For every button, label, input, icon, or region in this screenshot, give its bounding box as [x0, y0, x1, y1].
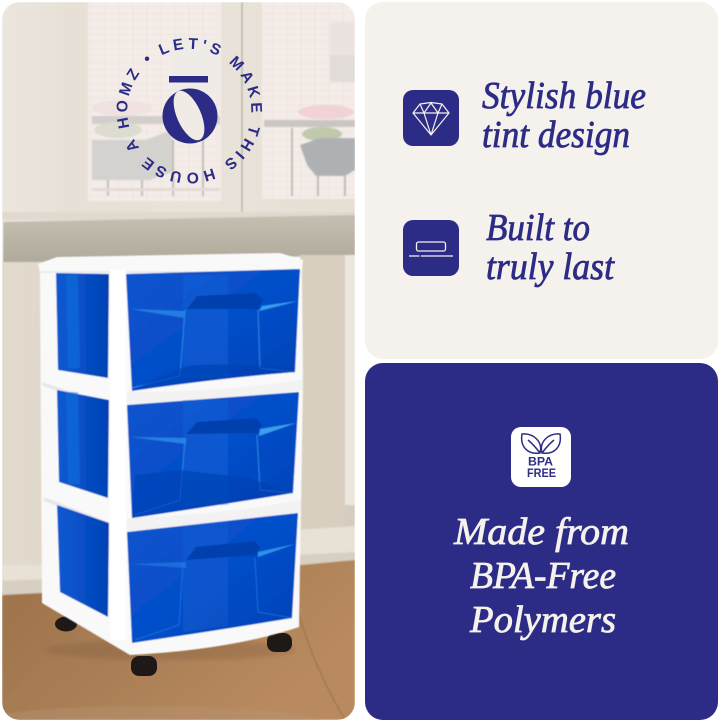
- window ledge: [3, 215, 355, 265]
- side panels: [56, 273, 109, 378]
- heading: made from BPA-free polymers: BPA-Free: [470, 555, 616, 597]
- icon: BPA free badge: FREE: [527, 466, 556, 480]
- heading: stylish blue tint design: Stylish blue: [482, 75, 646, 117]
- baseboard: [4, 526, 355, 580]
- panel: product photo: [2, 2, 355, 720]
- window pane left: [88, 2, 221, 201]
- panel: features: [365, 2, 718, 359]
- icon: durable block: [403, 220, 459, 276]
- shadow: [48, 642, 292, 660]
- wood floor: [2, 560, 355, 720]
- brand logo: [116, 38, 262, 184]
- window pane right: [262, 2, 355, 199]
- heading: built to truly last: truly last: [486, 246, 615, 288]
- panel: BPA free: [365, 363, 718, 720]
- feature: stylish design: [403, 75, 646, 156]
- heading: made from BPA-free polymers: Made from: [453, 511, 629, 553]
- wheels: [55, 616, 292, 676]
- drawer cabinet: [38, 253, 303, 655]
- icon: diamond: [403, 90, 459, 146]
- icon: BPA free badge: [511, 427, 571, 487]
- white frame: [38, 253, 303, 655]
- heading: stylish blue tint design: tint design: [482, 114, 630, 156]
- heading: built to truly last: Built to: [486, 207, 590, 249]
- drawer 2: [127, 392, 299, 518]
- drawer 3: [127, 513, 298, 643]
- icon: BPA free badge: BPA: [528, 454, 553, 468]
- heading: made from BPA-free polymers: Polymers: [469, 599, 616, 641]
- lower wall: [2, 261, 355, 566]
- circular slogan: LET'S MAKE THIS HOUSE A HOMZ •: [116, 38, 262, 184]
- feature: built to last: [403, 207, 615, 288]
- photo background: room: [0, 2, 355, 720]
- drawer 1: [126, 269, 300, 391]
